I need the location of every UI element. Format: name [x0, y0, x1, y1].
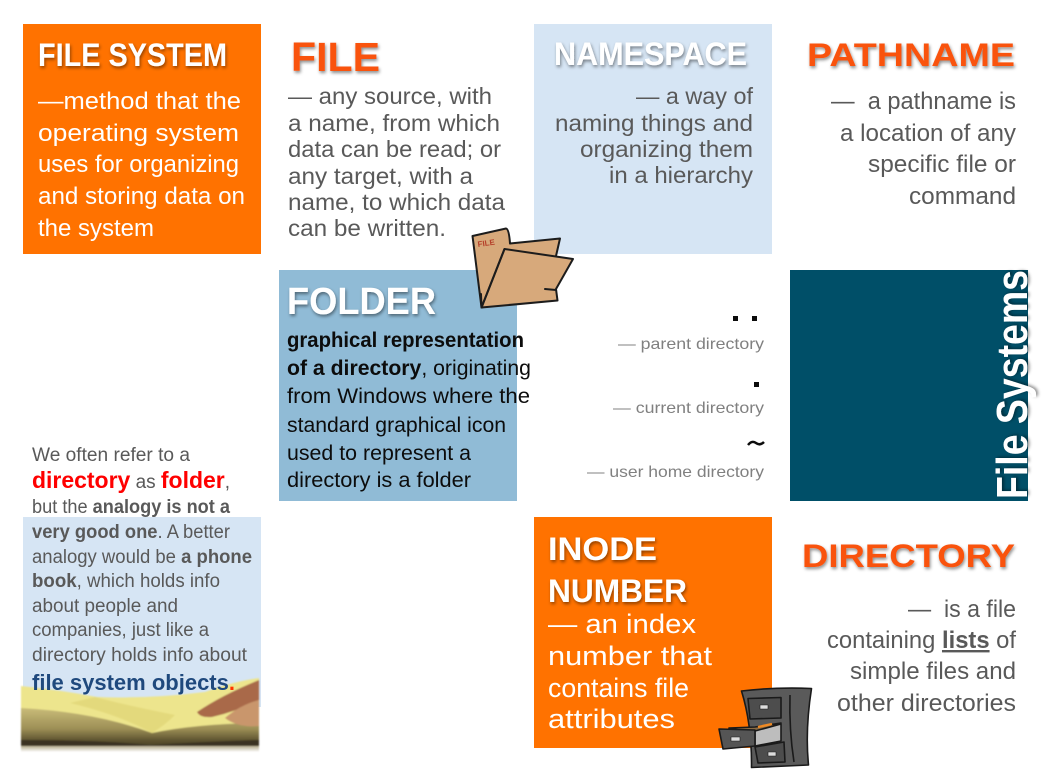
- heading: namespace: NAMESPACE: [554, 36, 747, 72]
- label: current directory: — current directory: [613, 400, 764, 417]
- text: analogy explanation: [32, 445, 252, 666]
- text: inode definition: attributes: [548, 704, 675, 734]
- text: file definition: data can be read; or: [288, 136, 501, 162]
- panel: phone book analogy: [21, 445, 261, 752]
- text: namespace definition: — a way of: [636, 83, 754, 109]
- heading: directory: DIRECTORY: [802, 538, 1015, 574]
- text: inode definition: number that: [548, 641, 713, 671]
- text: namespace definition: in a hierarchy: [609, 162, 754, 188]
- text: pathname definition: a location of any: [840, 120, 1016, 147]
- text: file system definition: uses for organizing: [38, 151, 239, 178]
- panel: inode number: [534, 517, 772, 748]
- text: pathname definition: command: [909, 183, 1016, 210]
- text: directory definition: simple files and: [850, 658, 1016, 685]
- icon: manila folder: FILE: [477, 238, 496, 249]
- text: folder definition: standard graphical icon: [287, 414, 506, 437]
- text: analogy explanation: directory holds info about: [32, 645, 248, 666]
- panel: file systems side title: [790, 270, 1037, 501]
- text: file definition: any target, with a: [288, 163, 473, 189]
- panel: file: [288, 34, 505, 241]
- panel: folder: [279, 270, 531, 501]
- text: analogy explanation: companies, just like a: [32, 620, 209, 641]
- text: file definition: a name, from which: [288, 110, 500, 136]
- text: file definition: — any source, with: [288, 83, 492, 109]
- heading: inode number: NUMBER: [548, 573, 687, 609]
- text: directory definition: containing lists of: [827, 627, 1016, 654]
- heading: file: FILE: [291, 34, 380, 80]
- panel: directory: [802, 538, 1016, 717]
- heading: pathname: PATHNAME: [807, 37, 1015, 73]
- icon: manila folder: [472, 228, 573, 308]
- text: folder definition: of a directory, originating: [287, 357, 531, 380]
- text: analogy explanation: analogy would be a phone: [32, 547, 252, 568]
- panel: directory shortcuts: [587, 316, 764, 481]
- panel: pathname: [807, 37, 1016, 210]
- text: folder definition: from Windows where the: [287, 385, 530, 408]
- text: file definition: [288, 83, 505, 241]
- heading: inode number: INODE: [548, 531, 657, 567]
- text: pathname definition: [831, 88, 1016, 210]
- text: file system definition: operating system: [38, 120, 239, 147]
- text: directory definition: other directories: [837, 690, 1016, 717]
- text: folder definition: [287, 329, 531, 492]
- text: namespace definition: [555, 83, 754, 188]
- text: inode definition: [548, 609, 713, 734]
- symbol: parent directory dots: [733, 316, 757, 321]
- text: inode definition: — an index: [548, 609, 697, 639]
- text: file system objects: file system objects.: [32, 670, 235, 695]
- text: analogy explanation: about people and: [32, 596, 178, 617]
- text: file definition: name, to which data: [288, 189, 505, 215]
- text: pathname definition: — a pathname is: [831, 88, 1016, 115]
- heading: folder: FOLDER: [287, 281, 436, 323]
- text: inode definition: contains file: [548, 673, 689, 703]
- text: namespace definition: naming things and: [555, 110, 753, 136]
- text: file system definition: —method that the: [38, 88, 241, 115]
- text: pathname definition: specific file or: [868, 151, 1016, 178]
- text: analogy explanation: very good one. A better: [32, 522, 231, 543]
- text: analogy explanation: but the analogy is not a: [32, 497, 230, 518]
- text: directory definition: — is a file: [908, 596, 1016, 623]
- symbol: current directory dot: [754, 382, 759, 387]
- text: folder definition: used to represent a: [287, 442, 471, 465]
- heading: file system: FILE SYSTEM: [38, 37, 227, 73]
- text: namespace definition: organizing them: [580, 136, 753, 162]
- text: analogy explanation: directory as folder,: [32, 467, 230, 493]
- label: user home directory: — user home directory: [587, 464, 764, 481]
- symbol: tilde: [748, 442, 764, 445]
- label: parent directory: — parent directory: [618, 336, 764, 353]
- image: open yellow book with pointing finger: [21, 678, 259, 752]
- text: file system definition: and storing data on: [38, 183, 245, 210]
- text: file system definition: the system: [38, 215, 154, 242]
- text: directory definition: [827, 596, 1016, 717]
- text: analogy explanation: We often refer to a: [32, 445, 190, 466]
- text: file system definition: [38, 88, 245, 242]
- text: folder definition: directory is a folder: [287, 469, 471, 492]
- heading: file systems: File Systems: [988, 270, 1037, 499]
- text: analogy explanation: book, which holds info: [32, 571, 220, 592]
- panel: namespace: [534, 24, 772, 254]
- icon: filing cabinet: [719, 688, 812, 768]
- text: folder definition: graphical representation: [287, 329, 524, 352]
- heading: inode number: [548, 531, 687, 609]
- text: file definition: can be written.: [288, 215, 446, 241]
- panel: file system: [23, 24, 261, 254]
